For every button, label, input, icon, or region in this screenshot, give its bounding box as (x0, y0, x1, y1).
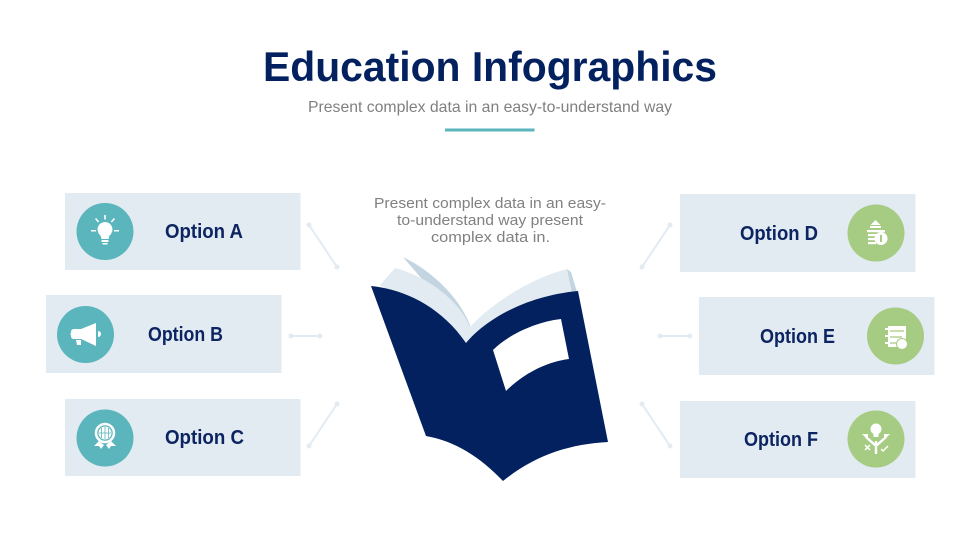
book cover label window (493, 319, 569, 391)
panel: option C (65, 399, 300, 476)
panel: option F (680, 401, 916, 478)
title underline (445, 128, 534, 132)
icon: decision arrows (862, 424, 890, 454)
label: Option A (165, 221, 243, 243)
book illustration (371, 257, 608, 481)
label: Option E (760, 326, 835, 348)
panel: option E (699, 297, 934, 375)
label: Option F (744, 429, 818, 451)
center description: Present complex data in an easy- (374, 195, 606, 212)
icon: award globe (94, 424, 116, 449)
panel: option A (65, 193, 300, 270)
center description (374, 195, 606, 246)
icon: checklist with clock (885, 326, 908, 350)
connector F (640, 402, 672, 448)
panel: option D (680, 194, 916, 272)
icon: light bulb (91, 215, 119, 244)
connector B (288, 334, 322, 338)
label: Option B (148, 324, 223, 346)
title: Education Infographics (263, 43, 717, 90)
center description: complex data in. (431, 229, 550, 246)
connector E (658, 334, 692, 338)
connector D (640, 222, 672, 270)
subtitle: Present complex data in an easy-to-understand way (308, 99, 672, 116)
connector A (306, 222, 340, 270)
panel: option B (46, 295, 282, 373)
label: Option C (165, 427, 244, 449)
icon: coins with arrow (867, 220, 888, 245)
label: Option D (740, 223, 818, 245)
center description: to-understand way present (397, 212, 584, 229)
icon: megaphone (70, 323, 101, 346)
connector C (306, 402, 340, 448)
